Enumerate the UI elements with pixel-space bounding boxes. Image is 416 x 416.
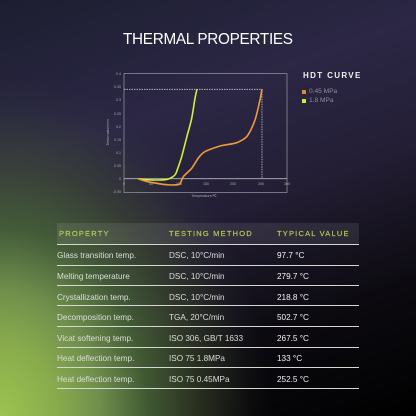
properties table: [57, 223, 359, 389]
properties table: 218.8 °C: [277, 293, 309, 302]
table header row: TYPICAL VALUE: [277, 229, 350, 238]
y axis ticks: 0.3: [116, 98, 121, 102]
y axis ticks: 0.1: [116, 151, 121, 155]
row: HDT 0.45: Heat deflection temp.: [57, 375, 134, 384]
y axis ticks: 0.15: [114, 138, 121, 142]
row: crystallization: Crystallization temp.: [57, 293, 131, 302]
y axis ticks: [113, 72, 121, 194]
row: glass transition: Glass transition temp.: [57, 251, 136, 260]
x axis ticks: 300: [284, 182, 290, 186]
y axis ticks: 0.25: [114, 112, 121, 116]
legend item: 1.8 MPa: 1.8 MPa: [309, 97, 334, 104]
y axis ticks: -0.05: [113, 190, 121, 194]
y axis ticks: 0.35: [114, 85, 121, 89]
table header row: [57, 223, 359, 245]
x axis ticks: 250: [258, 182, 264, 186]
x axis ticks: 50: [149, 182, 153, 186]
line chart: HDT curve: Deformation/mm: [106, 119, 110, 145]
properties table: 279.7 °C: [277, 272, 309, 281]
legend item: 0.45 MPa: 0.45 MPa: [309, 88, 337, 95]
properties table: DSC, 10°C/min: [169, 272, 225, 281]
table header row: PROPERTY: [59, 229, 110, 238]
curve: 1.8 MPa: [138, 89, 197, 180]
table header row: TESTING METHOD: [169, 229, 253, 238]
chart frame: [124, 74, 287, 192]
x axis ticks: 100: [176, 182, 182, 186]
x axis ticks: [123, 182, 290, 186]
curve: 0.45 MPa: [138, 89, 262, 185]
y axis ticks: 0.4: [116, 72, 121, 76]
title: THERMAL PROPERTIES: [123, 31, 293, 48]
dashed reference lines: [124, 89, 262, 179]
row: HDT 1.8: Heat deflection temp.: [57, 354, 134, 363]
axis titles: Temperature/℃: [191, 194, 218, 198]
properties table: ISO 75 0.45MPa: [169, 375, 230, 384]
properties table: DSC, 10°C/min: [169, 251, 225, 260]
legend: [302, 71, 362, 104]
properties table: 252.5 °C: [277, 375, 309, 384]
line chart: HDT curve: [106, 72, 290, 198]
properties table: TGA, 20°C/min: [169, 313, 224, 322]
y axis ticks: 0.05: [114, 164, 121, 168]
properties table: ISO 306, GB/T 1633: [169, 334, 243, 343]
x axis ticks: 200: [230, 182, 236, 186]
legend title: HDT CURVE: [303, 71, 362, 80]
y axis ticks: 0.2: [116, 125, 121, 129]
x axis ticks: 0: [123, 182, 125, 186]
properties table: 133 °C: [277, 354, 302, 363]
row: melting: Melting temperature: [57, 272, 130, 281]
properties table: DSC, 10°C/min: [169, 293, 225, 302]
properties table: 97.7 °C: [277, 251, 304, 260]
x axis ticks: 150: [203, 182, 209, 186]
y axis ticks: 0: [119, 177, 121, 181]
row: decomposition: Decomposition temp.: [57, 313, 134, 322]
properties table: ISO 75 1.8MPa: [169, 354, 225, 363]
row: vicat: Vicat softening temp.: [57, 334, 133, 343]
properties table: 267.5 °C: [277, 334, 309, 343]
properties table: 502.7 °C: [277, 313, 309, 322]
